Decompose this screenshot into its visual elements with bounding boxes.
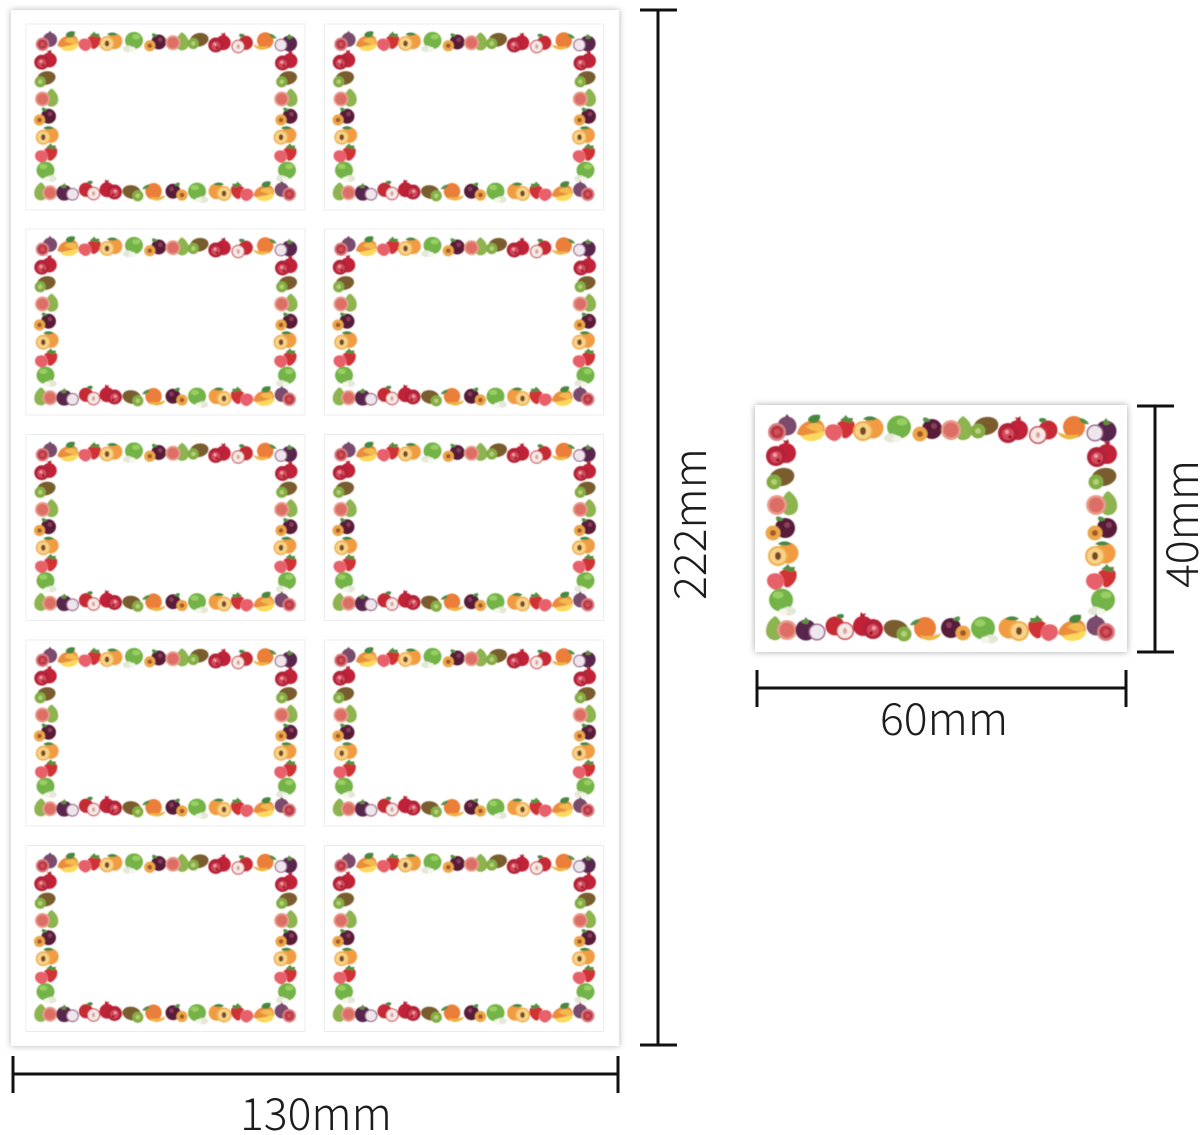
dimension text: 60mm: 60mm xyxy=(880,683,1008,748)
label row 3 left xyxy=(26,434,305,620)
label row 2 right xyxy=(324,229,604,415)
label row 4 left xyxy=(26,640,305,826)
label row 1 left xyxy=(26,24,305,210)
label row 4 right xyxy=(324,640,604,826)
label row 2 left xyxy=(26,229,305,415)
dimension arrow: label width xyxy=(757,670,1126,707)
dimension arrow: sheet height xyxy=(640,10,677,1045)
label row 5 right xyxy=(324,846,604,1032)
dimension text: 222mm: 222mm xyxy=(654,448,719,600)
dimension arrow: label height xyxy=(1137,406,1174,652)
label row 1 right xyxy=(324,24,604,210)
label row 5 left xyxy=(26,846,305,1032)
sticker sheet xyxy=(11,10,619,1046)
enlarged single label xyxy=(755,405,1127,652)
dimension arrow: sheet width xyxy=(13,1056,618,1093)
label row 3 right xyxy=(324,434,604,620)
